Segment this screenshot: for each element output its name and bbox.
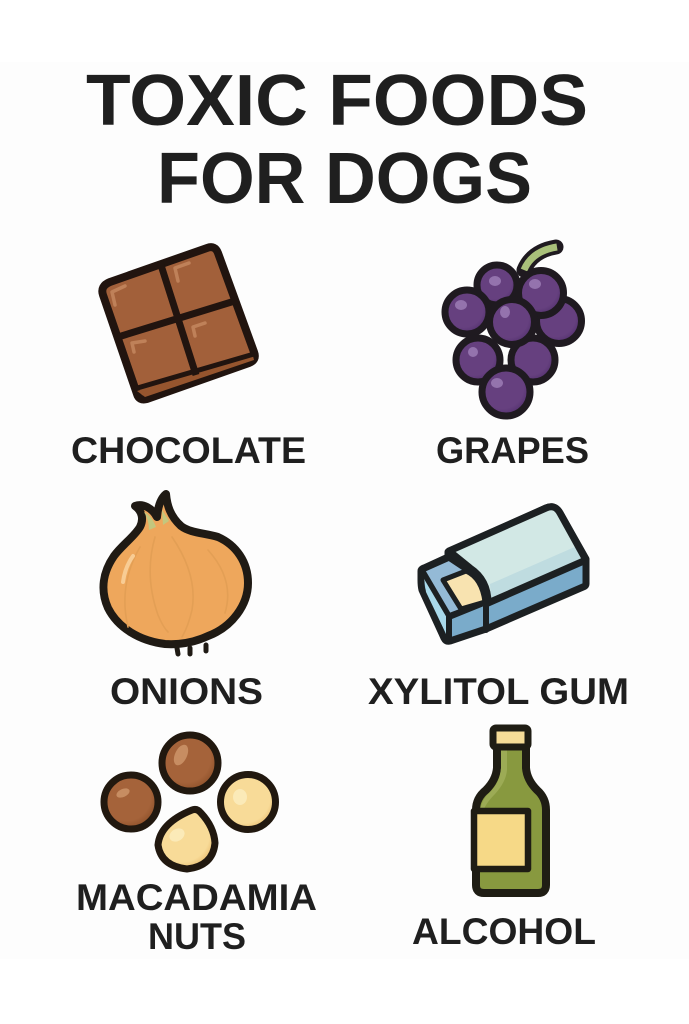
icon: macadamia nuts: [104, 735, 276, 869]
panel: grapes: [436, 247, 589, 471]
icon: wine bottle: [474, 728, 546, 893]
panel: macadamia nuts: [76, 735, 317, 957]
panel: alcohol: [412, 728, 596, 952]
label: macadamia nuts: [76, 877, 317, 957]
label: onions: ONIONS: [110, 671, 263, 712]
icon: onion: [103, 494, 248, 654]
label: macadamia nuts: NUTS: [148, 916, 246, 957]
label: alcohol: ALCOHOL: [412, 911, 596, 952]
icon: gum pack: [421, 507, 586, 641]
panel: chocolate: [71, 247, 306, 471]
label: chocolate: CHOCOLATE: [71, 430, 306, 471]
panel: xylitol gum: [368, 507, 629, 712]
icon: grapes: [445, 247, 582, 416]
title: TOXIC FOODS: [86, 61, 588, 141]
title: FOR DOGS: [157, 139, 532, 219]
title: [86, 61, 588, 219]
panel: onions: [103, 494, 263, 712]
label: macadamia nuts: MACADAMIA: [76, 877, 317, 918]
label: grapes: GRAPES: [436, 430, 589, 471]
label: xylitol gum: XYLITOL GUM: [368, 671, 629, 712]
icon: chocolate bar: [102, 247, 255, 399]
